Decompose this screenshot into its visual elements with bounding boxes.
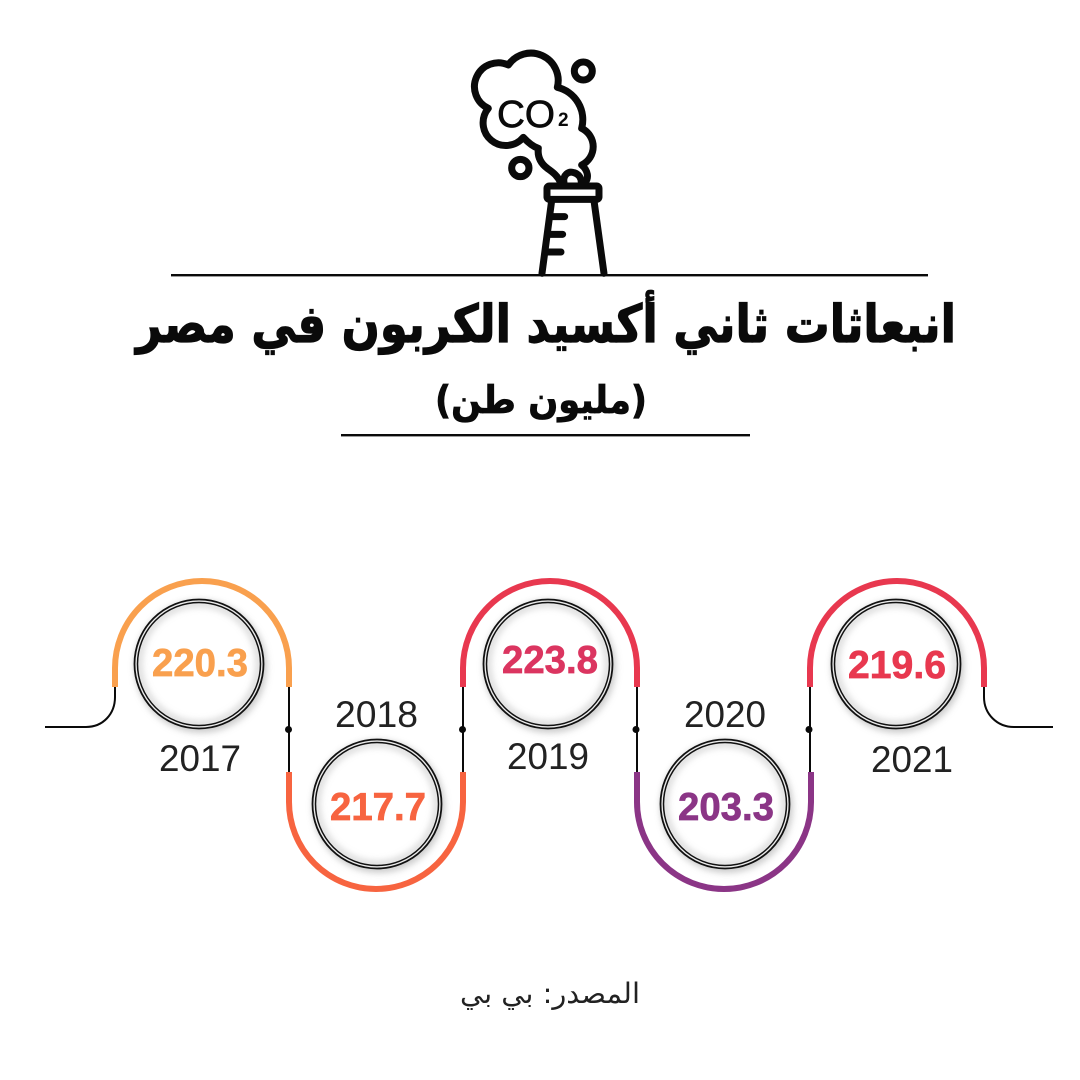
segment 2017: 2017 (159, 738, 241, 779)
icon: factory chimney with CO2 cloud: CO (497, 94, 555, 136)
segment 2021 (810, 581, 984, 780)
subtitle: (مليون طن) (435, 378, 647, 422)
segment 2019: 223.8 (502, 639, 598, 682)
top rule (171, 274, 928, 276)
segment 2020: 203.3 (678, 786, 774, 829)
title: انبعاثات ثاني أكسيد الكربون في مصر (133, 290, 956, 355)
segment 2017 (115, 581, 289, 779)
segment 2020 (637, 694, 811, 889)
segment 2018: 217.7 (330, 786, 426, 829)
segment 2018: 2018 (335, 694, 418, 735)
segment 2021: 2021 (871, 739, 953, 780)
segment 2019 (463, 581, 637, 777)
segment 2021: 219.6 (848, 644, 946, 687)
icon: factory chimney with CO2 cloud (474, 53, 604, 273)
segment 2020: 2020 (684, 694, 766, 735)
segment 2018 (289, 694, 463, 889)
icon: factory chimney with CO2 cloud: 2 (558, 110, 569, 131)
timeline connector line (45, 685, 1053, 775)
segment 2017: 220.3 (152, 642, 248, 685)
segment 2019: 2019 (507, 736, 589, 777)
bottom rule (341, 434, 750, 436)
source note: المصدر: بي بي (460, 977, 640, 1010)
